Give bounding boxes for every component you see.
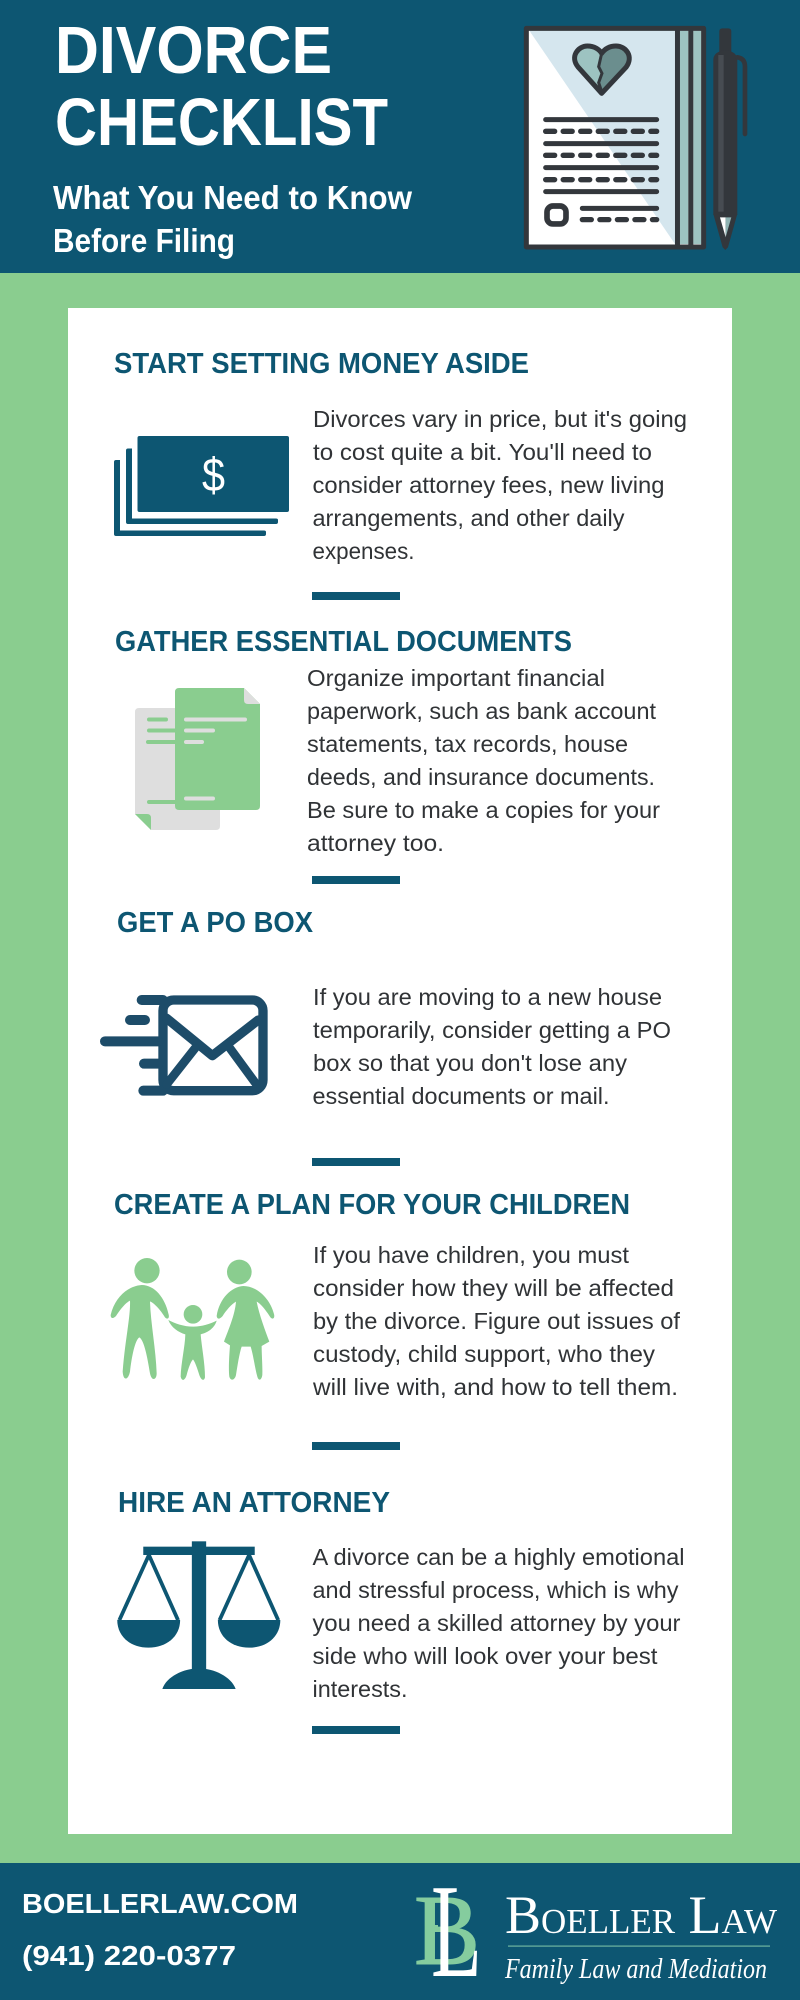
body text: essential documents or mail. [312, 1083, 610, 1109]
subtitle: What You Need to Know [53, 179, 412, 216]
icon: speeding envelope [105, 1000, 263, 1091]
body text: attorney too. [307, 830, 444, 856]
body text: Organize important financial [307, 665, 605, 691]
body text: and stressful process, which is why [312, 1577, 679, 1603]
icon: documents [135, 688, 260, 830]
body text: consider attorney fees, new living [312, 472, 664, 498]
body text: statements, tax records, house [307, 731, 628, 757]
phone number: (941) 220-0377 [22, 1940, 236, 1971]
section: start setting money aside [114, 348, 687, 564]
body text [312, 406, 687, 564]
body text: will live with, and how to tell them. [312, 1374, 678, 1400]
panel: white checklist card [68, 308, 732, 1834]
body text: box so that you don't lose any [313, 1050, 627, 1076]
icon: stack of money [114, 436, 289, 536]
body text: to cost quite a bit. You'll need to [313, 439, 652, 465]
logo monogram: B [414, 1874, 480, 1986]
title [55, 13, 388, 160]
subtitle [53, 179, 412, 259]
heading: START SETTING MONEY ASIDE [114, 348, 529, 380]
body text [312, 984, 671, 1109]
section: get a po box [105, 907, 671, 1109]
logo name: BOELLER LAW [505, 1885, 777, 1945]
website: BOELLERLAW.COM [22, 1888, 298, 1919]
body text: arrangements, and other daily [312, 505, 625, 531]
body text: A divorce can be a highly emotional [312, 1544, 684, 1570]
body text [312, 1544, 684, 1702]
icon: family [111, 1258, 274, 1380]
body text [312, 1242, 680, 1400]
body text: deeds, and insurance documents. [307, 764, 655, 790]
body text: expenses. [312, 538, 414, 564]
body text: temporarily, consider getting a PO [313, 1017, 671, 1043]
heading: GET A PO BOX [117, 907, 314, 939]
body text: If you have children, you must [313, 1242, 629, 1268]
body text [307, 665, 660, 856]
logo: Boeller Law [414, 1857, 777, 2000]
icon: stack of money: $ [202, 448, 225, 501]
heading: GATHER ESSENTIAL DOCUMENTS [115, 626, 572, 658]
body text: consider how they will be affected [313, 1275, 674, 1301]
title: CHECKLIST [55, 85, 388, 160]
body text: custody, child support, who they [313, 1341, 655, 1367]
heading: CREATE A PLAN FOR YOUR CHILDREN [114, 1189, 630, 1221]
panel: footer [0, 1857, 800, 2000]
panel: header [0, 0, 800, 273]
section: hire an attorney [117, 1487, 684, 1702]
heading: HIRE AN ATTORNEY [118, 1487, 390, 1519]
icon: scales of justice [117, 1541, 280, 1689]
subtitle: Before Filing [53, 222, 235, 259]
body text: side who will look over your best [312, 1643, 658, 1669]
icon: document with broken heart and pen [526, 28, 745, 250]
body text: Be sure to make a copies for your [307, 797, 660, 823]
section: create a plan for your children [111, 1189, 680, 1400]
body text: paperwork, such as bank account [307, 698, 656, 724]
body text: you need a skilled attorney by your [312, 1610, 681, 1636]
body text: Divorces vary in price, but it's going [313, 406, 687, 432]
title: DIVORCE [55, 13, 332, 88]
body text: If you are moving to a new house [313, 984, 662, 1010]
body text: interests. [312, 1676, 408, 1702]
section: gather essential documents [115, 626, 660, 856]
body text: by the divorce. Figure out issues of [313, 1308, 680, 1334]
